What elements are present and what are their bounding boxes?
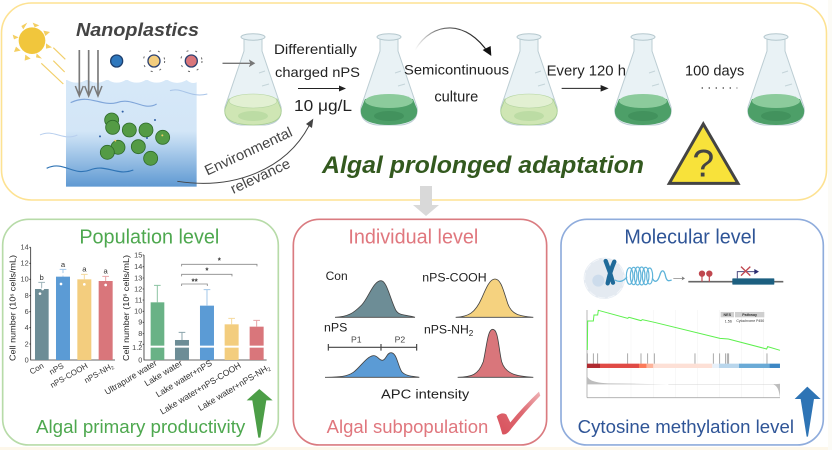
bar chart: cell number in lake water: *	[205, 267, 209, 276]
icon: flask 4	[615, 34, 671, 125]
bar chart: cell number in lake water: 12	[134, 284, 142, 293]
icon: warning triangle: ?	[692, 142, 714, 186]
bar chart: cell number in lake water: 11	[135, 295, 142, 304]
histogram: nPS-NH2	[424, 322, 533, 377]
bar chart: cell number by treatment: 8	[25, 291, 29, 300]
bar chart: cell number by treatment: Con	[28, 361, 45, 376]
icon: flask 3	[501, 34, 557, 125]
bar chart: cell number by treatment: a	[82, 265, 87, 274]
heading: Population level: Population level	[79, 226, 219, 248]
bar chart: cell number by treatment: 14	[21, 243, 29, 252]
bar chart: cell number by treatment: a	[104, 266, 109, 275]
label: algal subpopulation: Algal subpopulation	[327, 416, 488, 437]
bar chart: cell number in lake water: 14	[134, 262, 142, 271]
chart: gene set enrichment plot: Cytochrome P450	[736, 319, 764, 323]
bar chart: cell number in lake water: Lake water	[143, 358, 184, 388]
heading: Nanoplastics: Nanoplastics	[76, 20, 199, 40]
histogram: Con: Con	[326, 269, 348, 283]
bar chart: cell number in lake water: Cell number (10	[122, 304, 131, 361]
bar chart: cell number by treatment: 6	[9, 293, 14, 297]
histogram: nPS-COOH	[422, 271, 533, 317]
bar chart: cell number in lake water	[103, 250, 272, 416]
histogram: nPS with P1 and P2 gates	[324, 321, 419, 377]
histogram: nPS with P1 and P2 gates: P1	[351, 335, 362, 345]
label: cytosine methylation level: Cytosine methylation level	[578, 416, 794, 437]
text: differentially charged nPS: Differentially	[274, 41, 357, 57]
bar chart: cell number by treatment: Cell number (10	[9, 304, 18, 361]
icons: differently charged nanoplastic particles	[111, 50, 202, 72]
bar chart: cell number by treatment: a	[61, 260, 66, 269]
bar chart: cell number by treatment: 10	[21, 275, 29, 284]
bar chart: cell number in lake water: 10	[134, 307, 142, 316]
icon: red check mark	[497, 392, 540, 435]
process labels and arrows: Semicontinuous	[404, 62, 509, 78]
histogram: Con	[326, 269, 415, 317]
panel: population level	[3, 219, 278, 445]
chart: gene set enrichment plot	[587, 310, 780, 398]
bar chart: cell number in lake water: Lake water+nPS-NH	[196, 364, 269, 413]
bar chart: cell number in lake water: Lake water+nPS	[154, 358, 214, 399]
heading: Algal prolonged adaptation: Algal prolonged adaptation	[321, 152, 644, 179]
arrow: flask 1 to flask 2	[298, 88, 345, 90]
icon: flask 2	[361, 34, 417, 125]
icon: flask 5	[748, 34, 804, 125]
icon: blue up arrow	[795, 387, 821, 437]
bar chart: cell number in lake water: *	[218, 257, 222, 266]
bar chart: cell number by treatment: 2	[110, 365, 116, 372]
arrow: top to bottom	[413, 186, 439, 216]
bar chart: cell number by treatment	[9, 243, 116, 390]
bar chart: cell number by treatment: 6	[25, 307, 29, 316]
text: differentially charged nPS	[274, 41, 360, 115]
bar chart: cell number in lake water: 15	[134, 250, 142, 259]
bar chart: cell number by treatment: b	[40, 273, 44, 282]
process labels and arrows: culture	[434, 89, 478, 105]
panel: top experimental design	[2, 3, 826, 200]
panel: individual level	[293, 219, 547, 445]
chart: gene set enrichment plot: 1.56	[725, 319, 732, 323]
process labels and arrows: Every 120 h	[547, 64, 626, 80]
panel: molecular level	[561, 219, 823, 445]
bar chart: cell number by treatment: 2	[25, 339, 29, 348]
bar chart: cell number in lake water: Ultrapure water	[103, 358, 159, 397]
bar chart: cell number by treatment: nPS-NH	[83, 363, 113, 385]
label: algal primary productivity: Algal primary productivity	[36, 416, 246, 437]
bar chart: cell number in lake water: **	[192, 277, 199, 286]
process labels and arrows: 100 days	[685, 63, 744, 80]
histogram: nPS-NH2: nPS-NH	[424, 322, 468, 336]
histogram: nPS-COOH: nPS-COOH	[422, 271, 487, 285]
bar chart: cell number by treatment: 4	[25, 323, 29, 332]
arrow and label: environmental relevance: Environmental	[202, 125, 295, 179]
axis label: APC intensity: APC intensity	[381, 386, 470, 401]
bar chart: cell number in lake water: cells/mL)	[122, 255, 131, 294]
bar chart: cell number by treatment: nPS-COOH	[49, 361, 90, 390]
chart: gene set enrichment plot: Pathway	[742, 313, 758, 317]
bar chart: cell number in lake water: 1.2	[132, 343, 142, 352]
histogram: nPS with P1 and P2 gates: nPS	[324, 321, 347, 335]
bar chart: cell number in lake water: 0	[138, 355, 142, 364]
bar chart: cell number in lake water: 8	[138, 329, 142, 338]
bar chart: cell number in lake water: 7	[138, 339, 142, 348]
arrows: nanoplastics entering water	[75, 50, 102, 96]
bar chart: cell number in lake water: 6	[123, 293, 128, 297]
histogram: nPS-NH2: 2	[469, 329, 474, 338]
bar chart: cell number in lake water: 13	[134, 273, 142, 282]
icon: green up arrow	[247, 389, 273, 438]
text: differentially charged nPS: charged nPS	[275, 64, 360, 80]
chart: gene set enrichment plot: NES	[724, 313, 732, 317]
arrow: particles to flask	[222, 62, 254, 64]
bar chart: cell number in lake water: Lake water+nPS-COOH	[158, 360, 243, 416]
arrow and label: environmental relevance	[177, 119, 313, 198]
heading: Individual level: Individual level	[348, 226, 478, 248]
process labels and arrows	[404, 28, 744, 105]
text: differentially charged nPS: 10 μg/L	[294, 98, 352, 115]
bar chart: cell number by treatment: 12	[21, 259, 29, 268]
bar chart: cell number in lake water: 9	[138, 318, 142, 327]
icon: warning triangle	[669, 124, 738, 186]
heading: Molecular level: Molecular level	[624, 226, 756, 248]
histogram: nPS with P1 and P2 gates: P2	[395, 335, 405, 345]
bar chart: cell number in lake water: 2	[267, 367, 272, 373]
bar chart: cell number by treatment: cells/mL)	[9, 255, 18, 294]
illustration: cell nucleus with DNA methylation	[584, 258, 783, 299]
illustration: water body with algae	[40, 77, 207, 187]
bar chart: cell number by treatment: nPS	[48, 361, 65, 377]
arrow and label: environmental relevance: relevance	[228, 156, 293, 198]
icon: flask 1	[225, 34, 281, 125]
icon: sun	[13, 23, 65, 84]
bar chart: cell number by treatment: 0	[25, 355, 29, 364]
